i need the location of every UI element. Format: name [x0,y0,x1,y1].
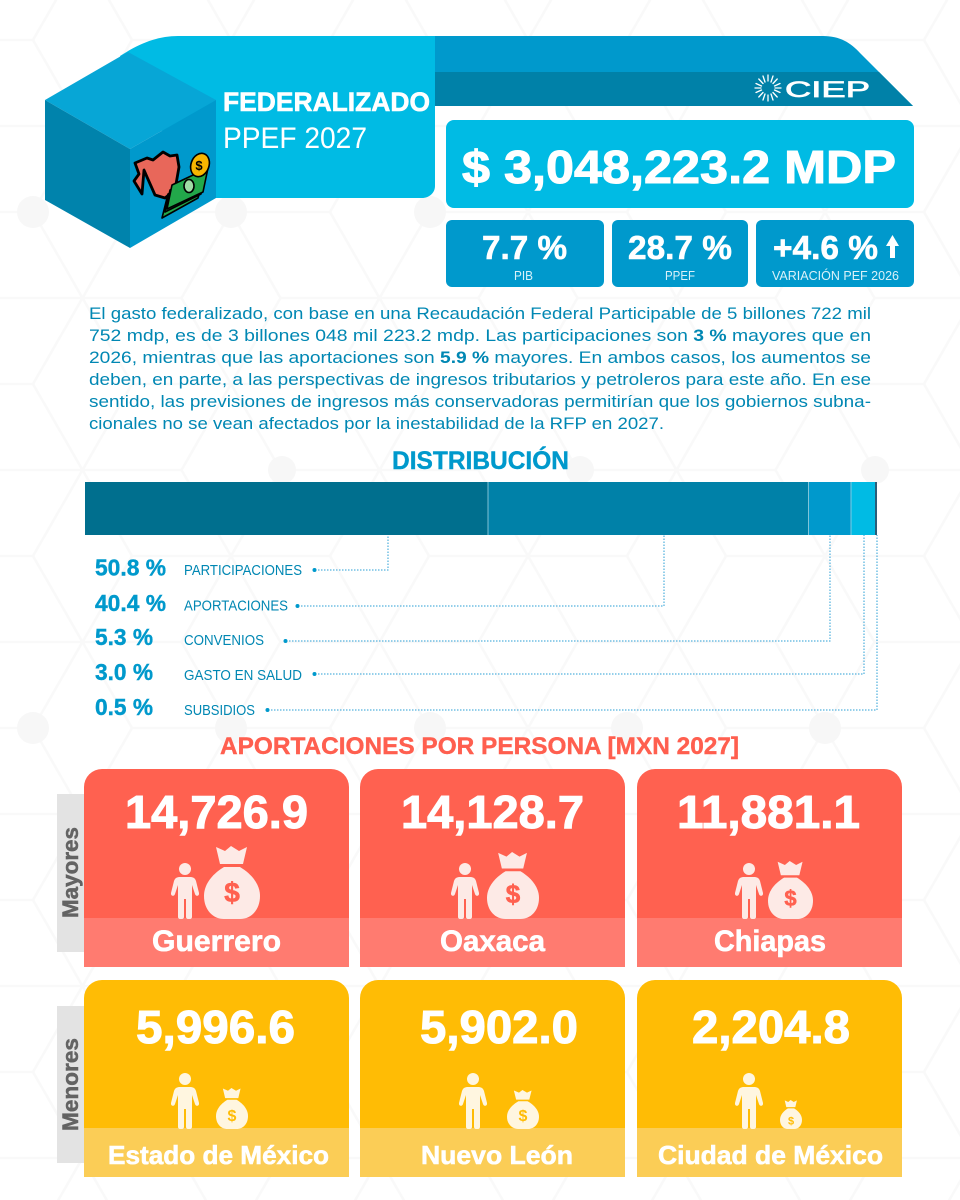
card: Guerrero [84,769,349,967]
panel: PPEF: PPEF [665,269,695,283]
legend: participaciones [95,535,388,580]
text block: intro paragraph: 2026, mientras que las aportaciones son 5.9 % mayores. En ambos casos, los aumentos se [89,349,871,367]
card: Oaxaca [360,769,625,967]
chart: stacked distribution bar [85,482,877,535]
card: Oaxaca: 14,128.7 [401,786,584,838]
icon: isometric cube with map and money: $ [195,158,203,173]
icon: money bag [204,846,260,919]
icon: person [171,863,199,919]
text block: intro paragraph: sentido, las previsiones de ingresos más conservadoras permitirían que los gobiernos subna- [89,393,871,411]
legend: subsidios: SUBSIDIOS [184,703,255,719]
card: Ciudad de México: Ciudad de México [658,1140,883,1170]
panel: variation [756,220,914,287]
panel: PIB: 7.7 % [482,229,567,266]
title: PPEF 2027 [223,122,367,155]
icon: person [735,1073,763,1129]
side tab: mayores [57,794,84,952]
legend: gasto en salud: 3.0 % [95,659,153,685]
legend: convenios: 5.3 % [95,624,153,650]
card: Oaxaca: Oaxaca [440,925,545,958]
side tab: menores [57,1006,84,1163]
legend: gasto en salud: GASTO EN SALUD [184,668,302,684]
heading: distribution: DISTRIBUCIÓN [392,445,569,475]
card: Estado de México: 5,996.6 [136,1001,295,1053]
icon: map of Mexico [134,152,179,198]
panel: PPEF [612,220,748,287]
card: Ciudad de México: 2,204.8 [692,1001,850,1053]
icon: banknotes and coin [162,151,213,218]
card: Chiapas: $ [784,886,797,911]
text block: intro paragraph [89,305,871,433]
card: Guerrero: Guerrero [152,925,281,958]
side tab: mayores: Mayores [58,827,83,918]
legend: aportaciones [95,535,664,616]
panel: PIB [446,220,604,287]
card: Chiapas: 11,881.1 [677,786,860,838]
text block: intro paragraph: cionales no se vean afectados por la inestabilidad de la RFP en 2027. [89,415,664,433]
arrow: up [886,235,899,258]
card: Nuevo León: Nuevo León [421,1140,573,1170]
icon: money bag [507,1090,539,1129]
card: Oaxaca: $ [506,879,521,909]
icon: money bag [780,1100,802,1129]
card: Chiapas [637,769,902,967]
icon: isometric cube with map and money [45,52,216,248]
legend: participaciones: PARTICIPACIONES [184,563,302,579]
title [223,87,430,155]
card: Guerrero: $ [224,877,240,908]
icon: money bag [216,1088,248,1129]
text block: intro paragraph: El gasto federalizado, con base en una Recaudación Federal Participable de 5 billones 722 mil [89,305,871,323]
panel: PPEF: 28.7 % [628,229,732,266]
panel: total amount [446,120,914,208]
logo: CIEP: CIEP [785,77,870,102]
legend: participaciones: 50.8 % [95,554,166,580]
panel: total amount: $ 3,048,223.2 MDP [462,141,896,193]
card: Nuevo León [360,980,625,1177]
icon: person [451,863,479,919]
card: Nuevo León: $ [519,1108,528,1125]
card: Ciudad de México [637,980,902,1177]
card: Ciudad de México: $ [788,1116,794,1128]
legend: convenios: CONVENIOS [184,633,264,649]
legend: aportaciones: 40.4 % [95,590,166,616]
side tab: menores: Menores [58,1038,83,1131]
legend: gasto en salud [95,535,864,685]
card: Nuevo León: 5,902.0 [420,1001,578,1053]
legend: subsidios: 0.5 % [95,694,153,720]
legend: subsidios [95,535,877,720]
title: FEDERALIZADO [223,87,430,117]
card: Chiapas: Chiapas [714,925,826,958]
logo: CIEP [755,75,870,102]
icon: person [735,863,763,919]
icon: money bag [487,852,539,919]
text block: intro paragraph: 752 mdp, es de 3 billones 048 mil 223.2 mdp. Las participaciones son 3 % mayores que en [89,327,871,345]
text block: intro paragraph: deben, en parte, a las perspectivas de ingresos tributarios y petroleros para este año. En ese [89,371,871,389]
heading: aportaciones por persona: APORTACIONES POR PERSONA [MXN 2027] [220,733,739,760]
icon: person [171,1073,199,1129]
panel: variation: +4.6 % [773,229,878,266]
icon: money bag [768,861,813,919]
legend: aportaciones: APORTACIONES [184,598,288,614]
card: Estado de México [84,980,349,1177]
card: Guerrero: 14,726.9 [125,786,308,838]
header panel: light blue title tab [120,36,435,198]
legend: convenios [95,535,830,650]
card: Estado de México: Estado de México [108,1140,329,1170]
icon: person [459,1073,487,1129]
panel: variation: VARIACIÓN PEF 2026 [772,268,899,283]
header ribbon: dark blue band [430,36,913,106]
panel: PIB: PIB [514,269,533,283]
card: Estado de México: $ [228,1108,237,1125]
